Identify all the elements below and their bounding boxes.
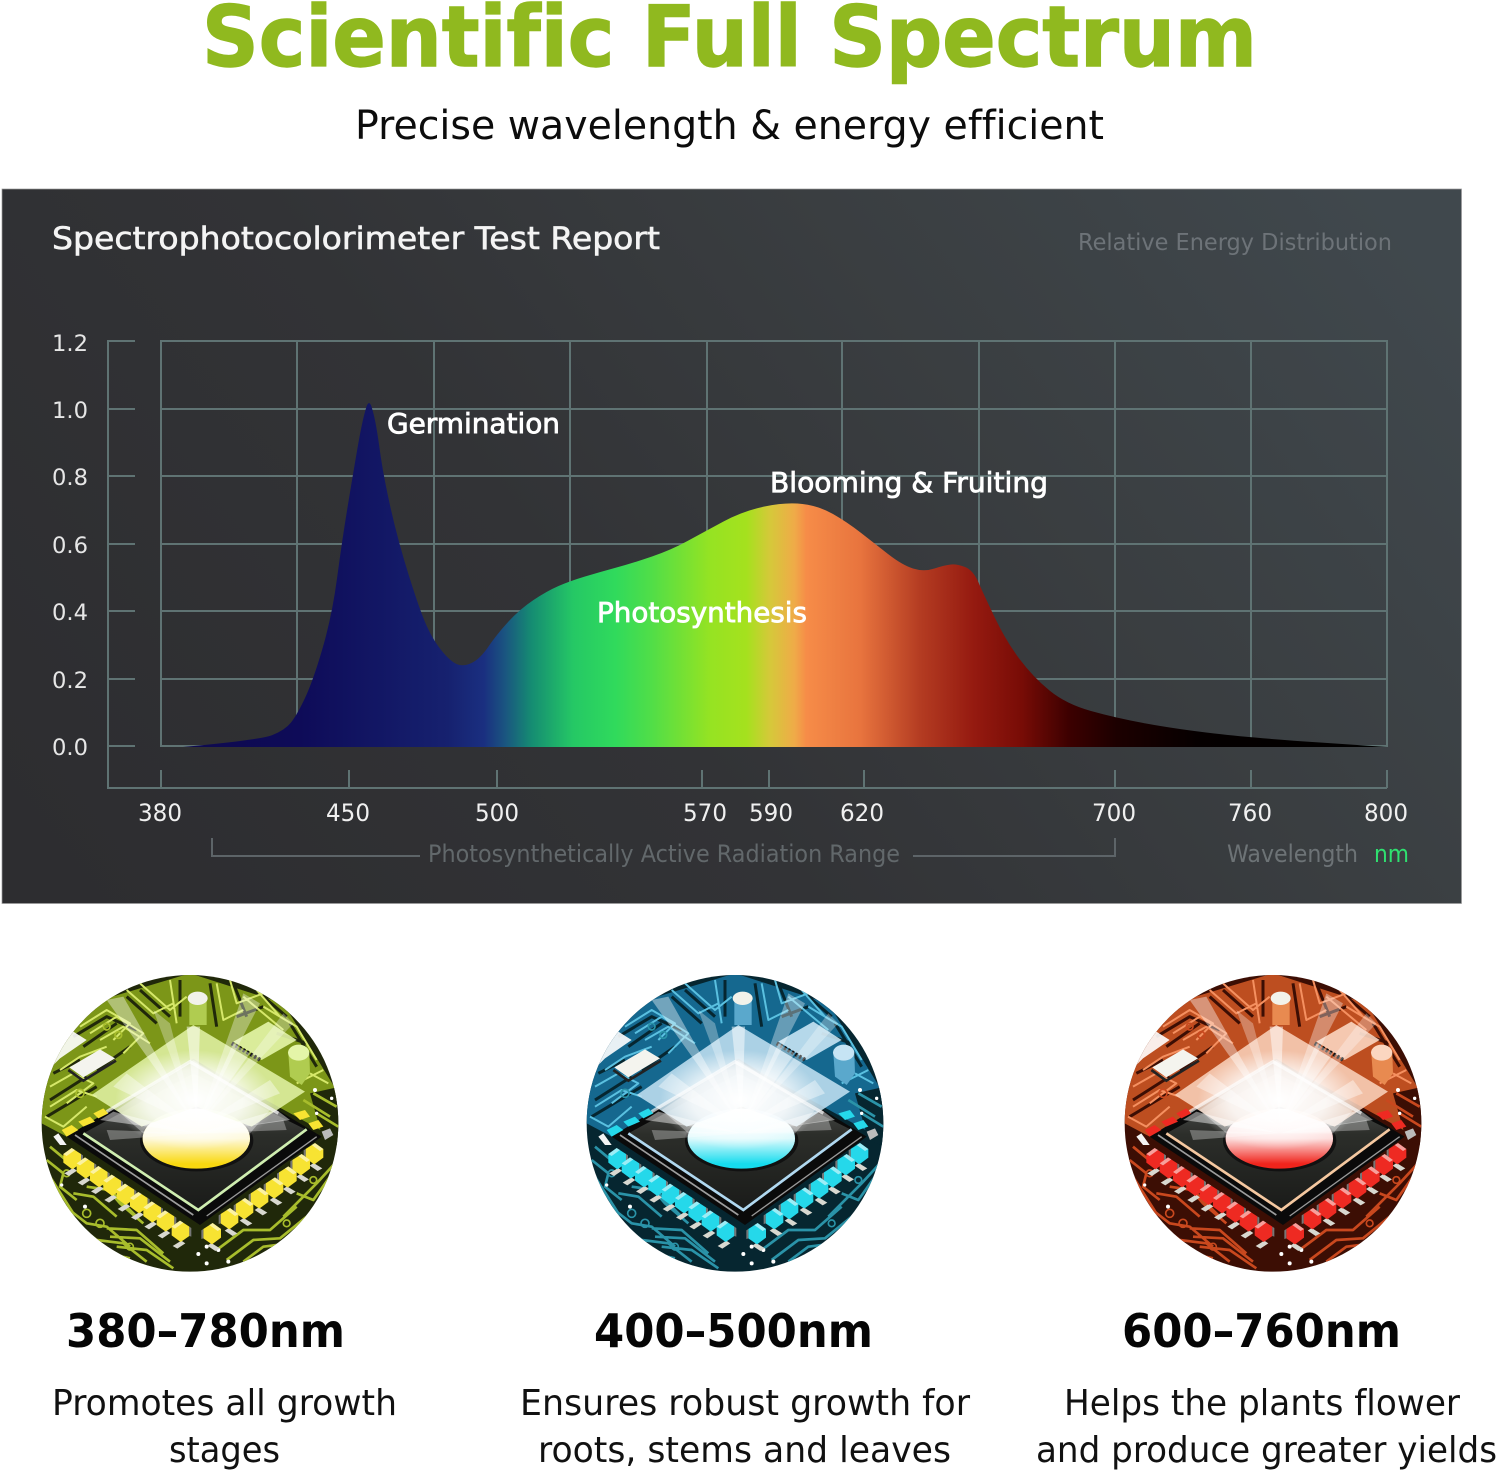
y-axis labels: 1.0 — [52, 399, 88, 424]
x-axis labels: 450 — [326, 799, 370, 827]
column 2 description: Ensures robust growth for — [520, 1383, 970, 1424]
curve label: Germination: Germination — [387, 407, 560, 440]
spectrum curve — [183, 403, 1387, 747]
y-axis labels: 0.6 — [52, 534, 88, 559]
curve label: Photosynthesis: Photosynthesis — [597, 596, 807, 629]
y-axis labels: 0.0 — [52, 736, 88, 761]
panel background — [2, 189, 1462, 904]
x-axis labels: 700 — [1092, 799, 1136, 827]
column 1 description: Promotes all growth — [52, 1383, 397, 1424]
panel heading: Spectrophotocolorimeter Test Report — [52, 221, 660, 257]
x-axis title: Wavelength — [1227, 840, 1358, 868]
x-axis labels: 800 — [1364, 799, 1408, 827]
icon: blue LED chip — [575, 960, 895, 1287]
y-axis labels — [52, 332, 88, 761]
axis frame and ticks — [108, 341, 1387, 788]
x-axis labels: 760 — [1228, 799, 1272, 827]
x-axis labels: 500 — [475, 799, 519, 827]
column 2 heading: 400–500nm — [594, 1304, 873, 1358]
column 1 heading: 380–780nm — [66, 1304, 345, 1358]
x-axis labels: 570 — [683, 799, 727, 827]
icon: red LED chip — [1113, 960, 1433, 1287]
subtitle: Precise wavelength & energy efficient — [355, 103, 1104, 149]
column 3 description — [1036, 1383, 1497, 1471]
x-axis labels: 380 — [138, 799, 182, 827]
PAR range bracket — [212, 838, 1115, 856]
PAR range label: Photosynthetically Active Radiation Range — [428, 840, 900, 868]
panel: spectrophotocolorimeter test report — [2, 189, 1462, 904]
y-axis labels: 0.8 — [52, 466, 88, 491]
x-axis labels: 590 — [749, 799, 793, 827]
y-axis labels: 0.2 — [52, 669, 88, 694]
curve label: Blooming & Fruiting: Blooming & Fruiting — [770, 466, 1048, 499]
x-axis labels — [138, 799, 1408, 827]
column 1 description — [52, 1383, 397, 1471]
column 3 description: Helps the plants flower — [1064, 1383, 1460, 1424]
y-axis labels: 1.2 — [52, 332, 88, 357]
column 2 description: roots, stems and leaves — [538, 1430, 951, 1471]
y-axis title: Relative Energy Distribution — [1078, 230, 1392, 256]
chart grid — [161, 341, 1387, 746]
x-axis unit: nm — [1374, 840, 1409, 868]
y-axis labels: 0.4 — [52, 601, 88, 626]
column 3 heading: 600–760nm — [1122, 1304, 1401, 1358]
x-axis labels: 620 — [840, 799, 884, 827]
column 2 description — [520, 1383, 970, 1471]
column 1 description: stages — [169, 1430, 280, 1471]
icon: full spectrum LED chip (green) — [30, 960, 350, 1287]
